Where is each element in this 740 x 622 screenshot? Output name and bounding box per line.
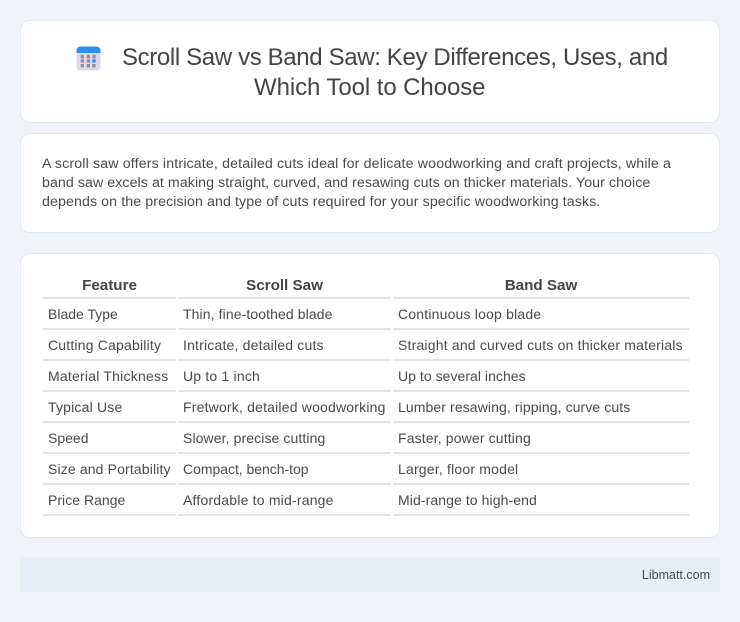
row: blade type — [48, 306, 541, 322]
row: price range — [48, 492, 537, 508]
row: cutting capability: Intricate, detailed cuts — [183, 337, 324, 353]
intro text: A scroll saw offers intricate, detailed cuts ideal for delicate woodworking and craft projects, while a — [42, 156, 671, 172]
row: material thickness — [48, 368, 526, 384]
row: price range: Affordable to mid-range — [183, 492, 334, 508]
row: typical use: Fretwork, detailed woodworking — [183, 399, 386, 415]
header row: Feature — [82, 277, 137, 294]
row: cutting capability: Cutting Capability — [48, 337, 161, 353]
icon: calendar — [76, 46, 100, 70]
row: size and portability: Larger, floor model — [398, 461, 518, 477]
row: material thickness: Material Thickness — [48, 368, 168, 384]
intro text: band saw excels at making straight, curved, and resawing cuts on thicker materials. Your choice — [42, 174, 650, 190]
row: price range: Price Range — [48, 492, 125, 508]
intro text — [42, 156, 671, 210]
panel: title card: Which Tool to Choose — [254, 74, 485, 101]
row: speed: Speed — [48, 430, 88, 446]
row: typical use: Lumber resawing, ripping, curve cuts — [398, 399, 630, 415]
row: material thickness: Up to several inches — [398, 368, 526, 384]
row: material thickness: Up to 1 inch — [183, 368, 260, 384]
header row — [82, 277, 578, 294]
footer bar — [20, 558, 720, 592]
row: blade type: Thin, fine-toothed blade — [183, 306, 333, 322]
header row: Band Saw — [505, 277, 577, 294]
intro text: depends on the precision and type of cuts required for your specific woodworking tasks. — [42, 194, 600, 210]
row: cutting capability: Straight and curved cuts on thicker materials — [398, 337, 683, 353]
panel: title card: Scroll Saw vs Band Saw: Key Differences, Uses, and — [122, 44, 668, 71]
panel: title card — [20, 20, 720, 123]
row: cutting capability — [48, 337, 683, 353]
table — [43, 277, 689, 516]
row: speed: Slower, precise cutting — [183, 430, 325, 446]
row: speed: Faster, power cutting — [398, 430, 531, 446]
header row: Scroll Saw — [246, 277, 323, 294]
row: speed — [48, 430, 531, 446]
row: blade type: Blade Type — [48, 306, 118, 322]
row: typical use: Typical Use — [48, 399, 122, 415]
row: size and portability — [48, 461, 518, 477]
row: size and portability: Compact, bench-top — [183, 461, 309, 477]
title — [122, 44, 668, 101]
row: blade type: Continuous loop blade — [398, 306, 541, 322]
footer text: Libmatt.com — [642, 568, 710, 582]
panel: introduction — [20, 133, 720, 233]
row: typical use — [48, 399, 630, 415]
row: price range: Mid-range to high-end — [398, 492, 537, 508]
row: size and portability: Size and Portability — [48, 461, 171, 477]
panel: comparison table — [20, 253, 720, 538]
